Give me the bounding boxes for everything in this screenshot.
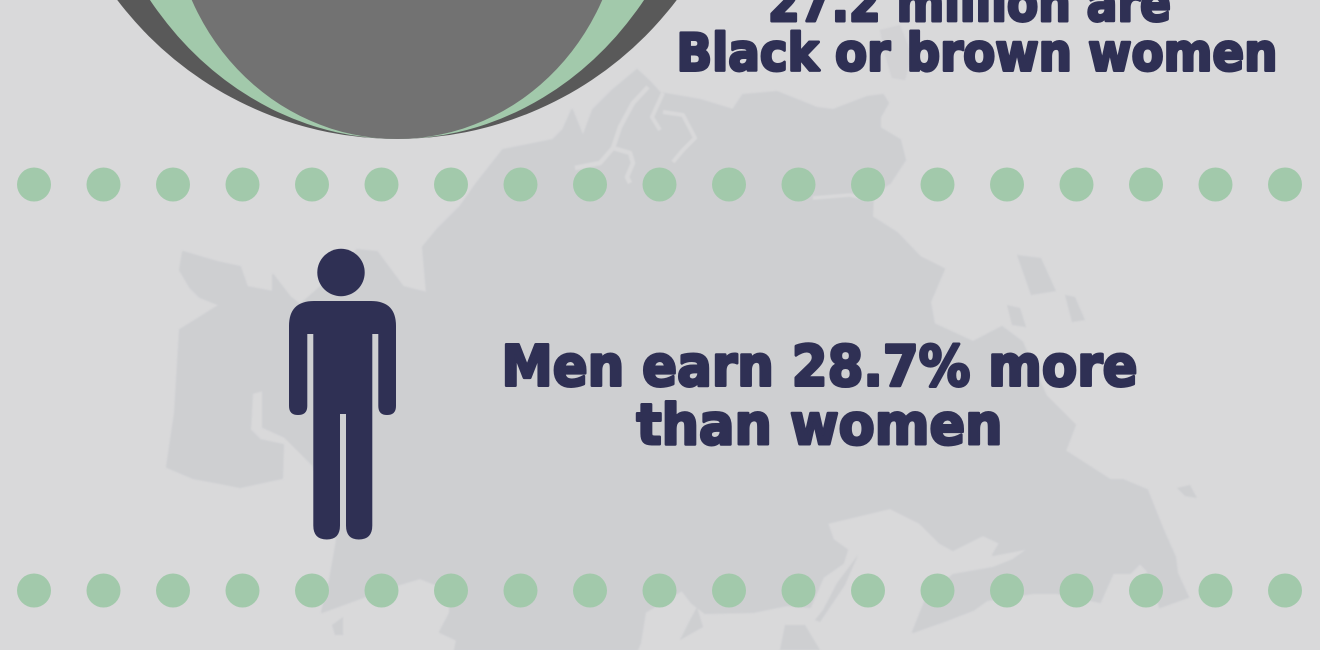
statistic: pay gap: Men earn 28.7% more (502, 334, 1138, 400)
pie graphic (46, 0, 748, 139)
bottom dotted divider (17, 574, 1302, 608)
icon: man (289, 249, 396, 540)
statistic: Black or brown women (676, 0, 1278, 84)
background map silhouette (167, 25, 1197, 650)
statistic: pay gap (502, 334, 1138, 458)
statistic: pay gap: than women (636, 393, 1002, 458)
top dotted divider (17, 168, 1302, 202)
